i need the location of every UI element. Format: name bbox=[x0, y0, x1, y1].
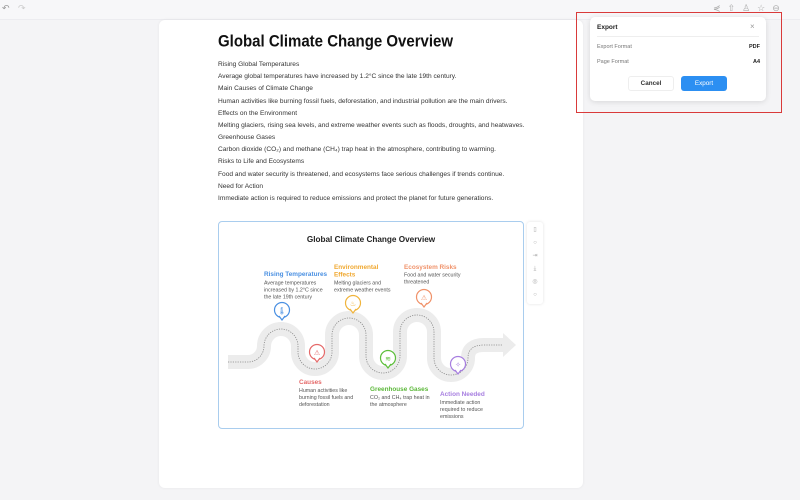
page format row bbox=[597, 59, 760, 65]
label: greenhouse gases: the atmosphere bbox=[370, 402, 407, 408]
marker: ecosystem risks bbox=[416, 290, 432, 307]
text block: Need for Action bbox=[218, 183, 263, 190]
page format row: A4 bbox=[753, 59, 760, 65]
export format row: Export Format bbox=[597, 44, 632, 50]
road bbox=[228, 315, 516, 375]
marker: rising temperatures bbox=[274, 302, 290, 320]
icon: redo: ↷ bbox=[18, 3, 26, 13]
marker: greenhouse gases: ≋ bbox=[385, 356, 391, 363]
label: environmental effects: Environmental bbox=[334, 264, 379, 271]
label: action needed: Immediate action bbox=[440, 400, 480, 406]
marker: causes bbox=[310, 344, 324, 362]
label: environmental effects: extreme weather events bbox=[334, 288, 391, 294]
marker: action needed: ✧ bbox=[455, 361, 461, 369]
label: environmental effects: Melting glaciers and bbox=[334, 280, 381, 286]
marker: rising temperatures: 🌡 bbox=[278, 307, 286, 315]
label: ecosystem risks: threatened bbox=[404, 280, 429, 286]
label: rising temperatures: Average temperatures bbox=[264, 280, 317, 286]
text block: Immediate action is required to reduce emissions and protect the planet for future generations. bbox=[218, 195, 493, 202]
label: causes: deforestation bbox=[299, 402, 330, 408]
side toolbar: ▯ bbox=[533, 227, 537, 233]
label: causes: Causes bbox=[299, 379, 322, 386]
cancel button bbox=[628, 76, 674, 91]
marker: environmental effects: ♨ bbox=[350, 300, 356, 308]
text block: Effects on the Environment bbox=[218, 110, 297, 117]
top bar bbox=[0, 0, 800, 20]
text block: Risks to Life and Ecosystems bbox=[218, 158, 304, 165]
label: rising temperatures: Rising Temperatures bbox=[264, 271, 328, 278]
side toolbar: ⤓ bbox=[534, 266, 536, 272]
text block: Human activities like burning fossil fuels, deforestation, and industrial pollution are the main drivers. bbox=[218, 98, 508, 105]
toolbar icons: ⋞⇧♙☆⊖ bbox=[713, 3, 787, 13]
side toolbar bbox=[527, 222, 543, 304]
side toolbar: ○ bbox=[533, 240, 537, 246]
marker: environmental effects bbox=[346, 296, 360, 313]
dialog title: Export bbox=[597, 24, 618, 31]
export button: Export bbox=[695, 80, 713, 87]
text block: Greenhouse Gases bbox=[218, 134, 275, 141]
label: causes bbox=[299, 379, 353, 408]
label: rising temperatures bbox=[264, 271, 328, 300]
text block: Average global temperatures have increased by 1.2°C since the late 19th century. bbox=[218, 73, 456, 80]
marker: causes: ⚠ bbox=[314, 349, 320, 357]
label: action needed: emissions bbox=[440, 414, 464, 420]
export format row bbox=[597, 44, 760, 50]
page card bbox=[159, 20, 583, 488]
label: rising temperatures: the late 19th century bbox=[264, 294, 312, 300]
label: greenhouse gases bbox=[370, 386, 430, 408]
label: ecosystem risks: Food and water security bbox=[404, 272, 461, 278]
label: action needed bbox=[440, 391, 485, 420]
label: ecosystem risks: Ecosystem Risks bbox=[404, 264, 457, 271]
export dialog bbox=[590, 17, 766, 101]
infographic title: Global Climate Change Overview bbox=[307, 235, 436, 244]
label: environmental effects bbox=[334, 264, 391, 294]
text block: Rising Global Temperatures bbox=[218, 61, 299, 68]
cancel button: Cancel bbox=[641, 80, 661, 87]
label: greenhouse gases: Greenhouse Gases bbox=[370, 386, 429, 393]
label: greenhouse gases: CO₂ and CH₄ trap heat in bbox=[370, 395, 430, 401]
text block: Carbon dioxide (CO₂) and methane (CH₄) trap heat in the atmosphere, contributing to warming. bbox=[218, 146, 496, 153]
page format row: Page Format bbox=[597, 59, 629, 65]
infographic bbox=[218, 221, 524, 429]
side toolbar: ○ bbox=[533, 292, 537, 298]
label: rising temperatures: increased by 1.2°C since bbox=[264, 288, 323, 294]
side toolbar: ⇥ bbox=[532, 253, 538, 259]
marker: ecosystem risks: ⚠ bbox=[421, 294, 427, 302]
marker: action needed bbox=[450, 356, 466, 374]
text block: Main Causes of Climate Change bbox=[218, 85, 313, 92]
export button bbox=[681, 76, 727, 91]
title: Global Climate Change Overview bbox=[218, 32, 453, 51]
text block bbox=[218, 61, 524, 202]
export format row: PDF bbox=[749, 44, 760, 50]
icon: undo: ↶ bbox=[2, 3, 10, 13]
label: ecosystem risks bbox=[404, 264, 461, 286]
label: causes: burning fossil fuels and bbox=[299, 395, 353, 401]
label: action needed: required to reduce bbox=[440, 407, 483, 413]
export dialog highlight bbox=[576, 12, 782, 113]
text block: Melting glaciers, rising sea levels, and extreme weather events such as floods, droughts, and heatwaves. bbox=[218, 122, 524, 129]
close icon: × bbox=[750, 22, 755, 31]
marker: greenhouse gases bbox=[380, 350, 396, 368]
text block: Food and water security is threatened, and ecosystems face serious challenges if trends continue. bbox=[218, 171, 504, 178]
side toolbar: ◎ bbox=[532, 279, 538, 285]
label: action needed: Action Needed bbox=[440, 391, 485, 398]
label: causes: Human activities like bbox=[299, 388, 347, 394]
label: environmental effects: Effects bbox=[334, 272, 356, 278]
